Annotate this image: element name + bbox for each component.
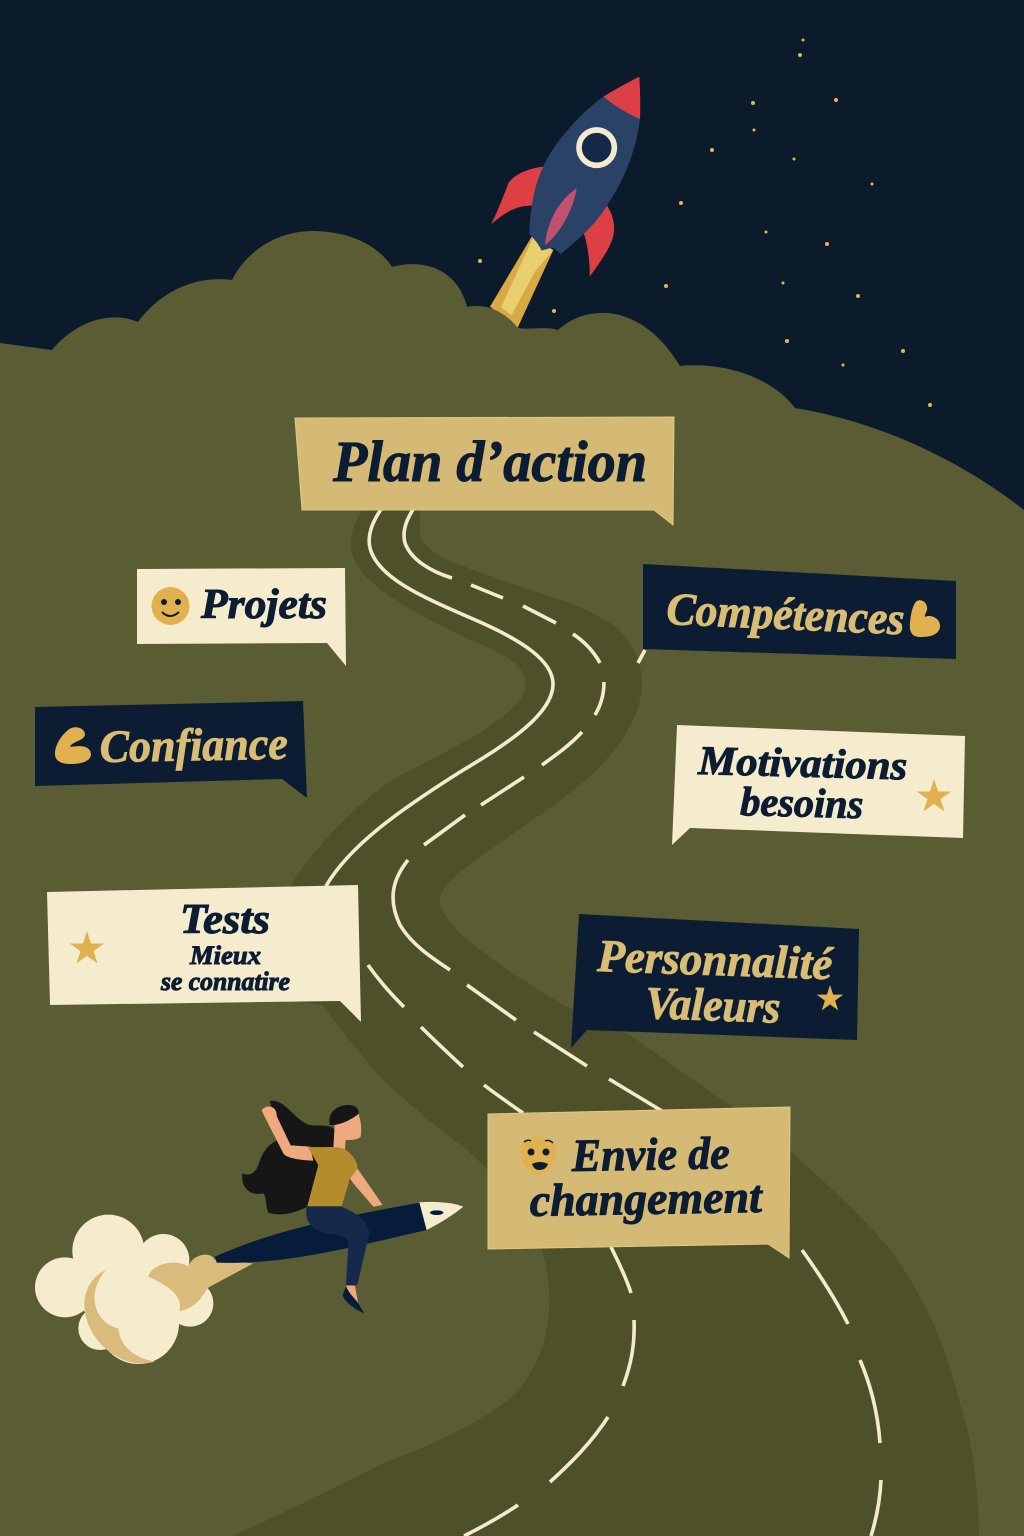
raised arm (262, 1106, 313, 1161)
icon: flexed arm (910, 600, 940, 637)
rocket nose (603, 77, 640, 119)
box (488, 1107, 790, 1258)
rocket window (579, 130, 614, 165)
box (35, 701, 307, 798)
label: Envie de changement (488, 1107, 790, 1258)
text: Confiance (99, 718, 288, 772)
box (571, 914, 859, 1048)
text: Mieux: Mieux (189, 941, 261, 970)
hair top (329, 1105, 359, 1125)
text: Envie de: Envie de (570, 1127, 730, 1181)
left road line (326, 508, 634, 1536)
icon: smiley (152, 587, 190, 625)
text: Projets (200, 582, 327, 628)
text: Tests: Tests (180, 897, 270, 943)
pen (215, 1202, 463, 1263)
icon: star (70, 931, 104, 964)
icon: star (817, 985, 843, 1010)
heading: Plan d’action (332, 429, 647, 494)
label: Personnalité Valeurs (571, 914, 859, 1048)
rocket pink stripe (545, 188, 577, 245)
right road dashes (393, 508, 881, 1536)
text: Valeurs: Valeurs (645, 977, 781, 1033)
rocket right fin (583, 205, 614, 277)
text: se connatire: se connatire (160, 967, 290, 996)
icon: star (917, 779, 951, 812)
text: Motivations: Motivations (697, 737, 908, 788)
icon: rocket (490, 77, 640, 328)
label: Compétences (643, 564, 956, 659)
label: Confiance (35, 701, 307, 798)
illustration: woman riding pen (35, 1101, 463, 1364)
smoke cloud (35, 1215, 253, 1364)
road (232, 508, 979, 1536)
rocket left fin (491, 167, 543, 224)
rocket body (529, 97, 640, 254)
hair back (242, 1101, 335, 1214)
rocket flame (490, 237, 553, 328)
label: Motivations besoins (672, 725, 965, 845)
neck and face (333, 1113, 361, 1149)
shoe (343, 1285, 364, 1313)
box (137, 568, 346, 666)
box (672, 725, 965, 845)
box (295, 417, 674, 525)
box (643, 564, 956, 659)
text: Personnalité: Personnalité (596, 930, 835, 989)
text: besoins: besoins (740, 778, 864, 827)
label: Projets (137, 568, 346, 666)
label: Plan d'action (295, 417, 674, 525)
trousers (306, 1207, 369, 1285)
stars (478, 38, 932, 407)
label: Tests (47, 885, 361, 1022)
icon: flexed arm (55, 727, 91, 764)
text: changement: changement (529, 1171, 763, 1226)
road surface (232, 510, 979, 1536)
front arm (350, 1168, 383, 1207)
shirt (307, 1147, 357, 1206)
box (47, 885, 361, 1022)
text: Compétences (666, 583, 906, 644)
icon: surprised face (520, 1137, 556, 1175)
